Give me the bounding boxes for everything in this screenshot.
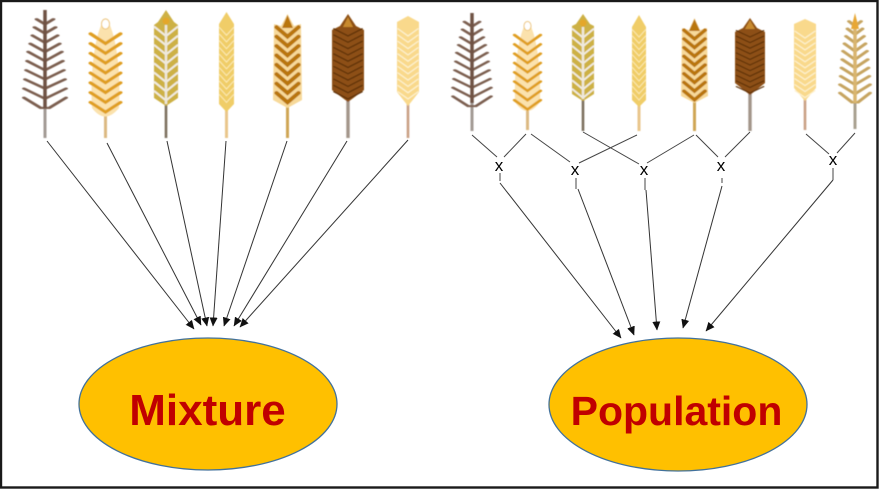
icon: wheat variety 6 — [332, 14, 364, 138]
cross symbols: x — [829, 150, 838, 169]
icon: wheat variety 5 — [273, 14, 302, 138]
cross symbols — [495, 150, 838, 179]
icon: population wheat 4 — [632, 15, 646, 131]
icon: population wheat 5 — [681, 18, 708, 131]
panel: mixture wheat varieties — [24, 10, 419, 138]
ellipse: mixture — [79, 338, 337, 470]
icon: wheat variety 1 — [24, 10, 66, 138]
icon: population wheat 3 — [572, 14, 594, 131]
cross symbols: x — [495, 156, 504, 175]
icon: population wheat 7 — [794, 19, 816, 130]
icon: population wheat 8 — [840, 13, 870, 129]
crossing lines: population — [472, 132, 855, 190]
icon: population wheat 6 — [735, 18, 765, 131]
icon: population wheat 1 — [453, 13, 491, 131]
icon: population wheat 2 — [514, 21, 540, 130]
icon: wheat variety 2 — [90, 18, 120, 138]
icon: wheat variety 7 — [397, 16, 419, 138]
arrows: mixture — [47, 140, 408, 329]
cross symbols: x — [717, 156, 726, 175]
icon: wheat variety 4 — [219, 12, 234, 138]
cross symbols: x — [571, 160, 580, 179]
label: Mixture: Mixture — [129, 386, 286, 435]
panel: population wheat varieties — [453, 13, 870, 131]
arrows: population — [500, 180, 833, 338]
icon: wheat variety 3 — [154, 10, 178, 138]
label: Population: Population — [571, 388, 782, 434]
ellipse: population — [549, 338, 807, 471]
cross symbols: x — [640, 160, 649, 179]
